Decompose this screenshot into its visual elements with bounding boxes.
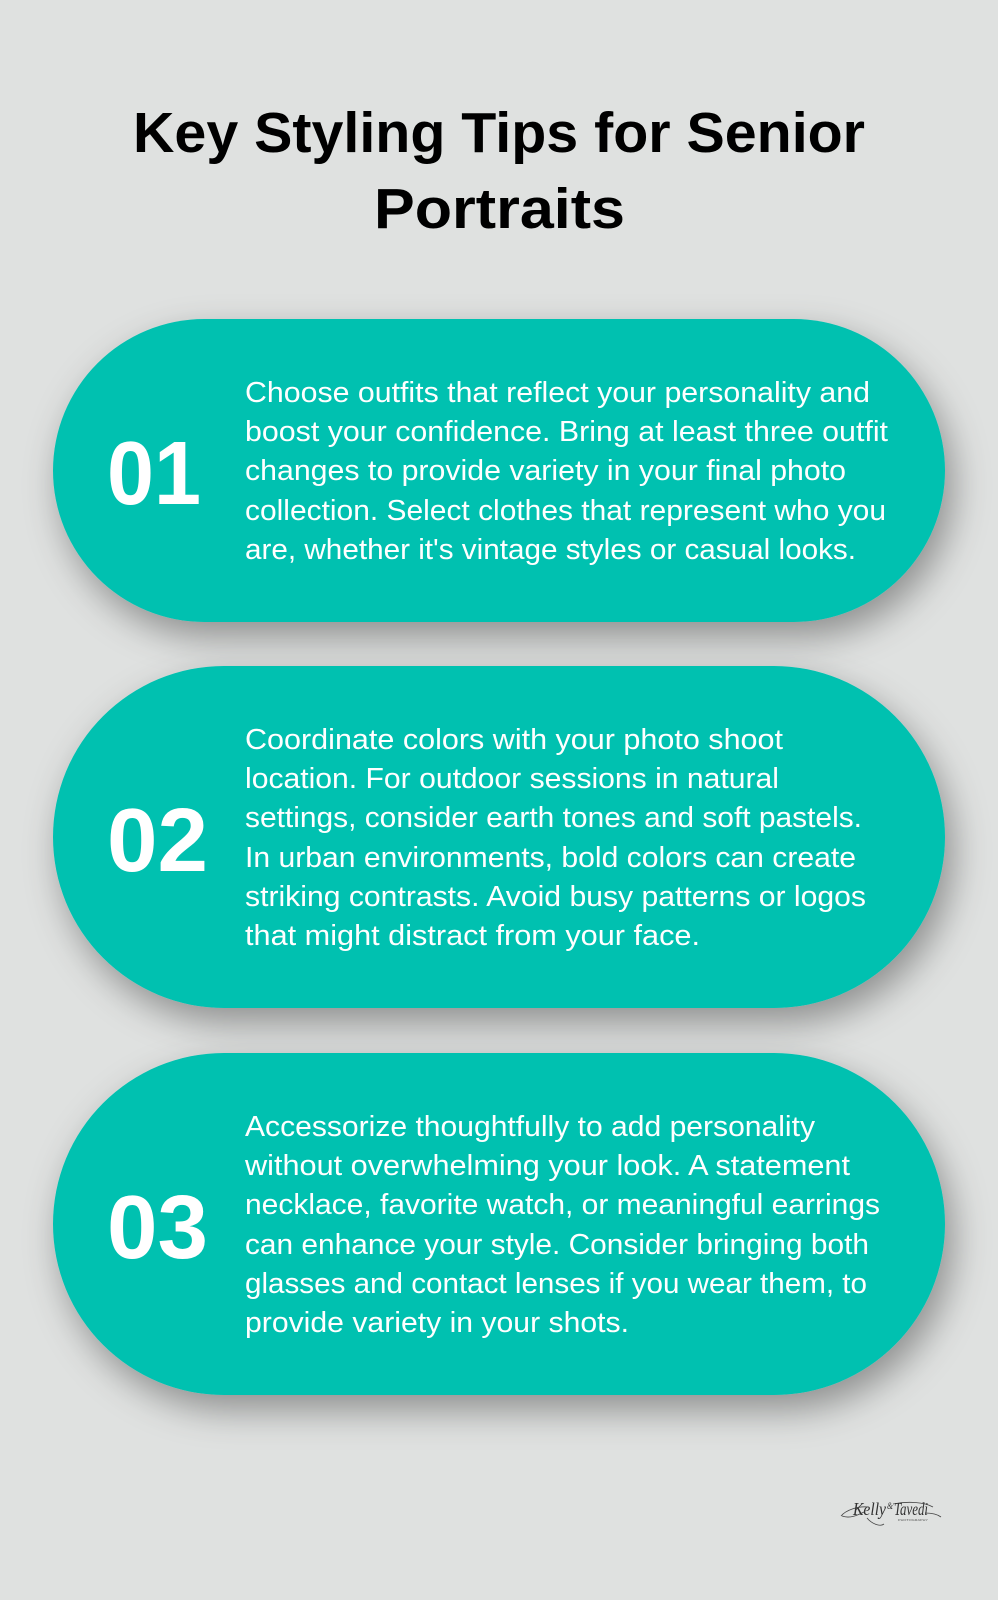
text block 01: collection. Select clothes that represent who you: [245, 495, 886, 527]
text block 02: In urban environments, bold colors can create: [245, 842, 856, 874]
text block 03: [244, 1111, 880, 1339]
number 01: 01: [107, 424, 201, 524]
logo: signature: Tavedi: [894, 1499, 928, 1519]
text block 03: can enhance your style. Consider bringing both: [245, 1229, 869, 1261]
title: Portraits: [374, 177, 625, 241]
text block 03: without overwhelming your look. A statement: [244, 1150, 850, 1182]
pill background 01: [53, 319, 945, 622]
text block 03: glasses and contact lenses if you wear them, to: [245, 1268, 867, 1300]
panel: tip 01: [53, 319, 945, 622]
text block 01: are, whether it's vintage styles or casual looks.: [245, 534, 856, 566]
title: [133, 101, 865, 241]
title: Key Styling Tips for Senior: [133, 101, 865, 165]
text block 03: Accessorize thoughtfully to add personality: [245, 1111, 816, 1143]
text block 01: changes to provide variety in your final photo: [245, 455, 846, 487]
logo: signature: Kelly: [852, 1499, 886, 1519]
text block 01: [245, 377, 888, 566]
logo: signature: &: [887, 1501, 893, 1511]
text block 01: boost your confidence. Bring at least three outfit: [245, 416, 888, 448]
text block 02: that might distract from your face.: [245, 920, 700, 952]
panel: tip 03: [53, 1053, 945, 1395]
text block 02: [245, 724, 866, 952]
text block 02: settings, consider earth tones and soft pastels.: [245, 802, 862, 834]
logo: signature: [841, 1499, 941, 1525]
text block 03: provide variety in your shots.: [245, 1307, 629, 1339]
logo: signature: PHOTOGRAPHY: [898, 1518, 928, 1522]
text block 01: Choose outfits that reflect your personality and: [245, 377, 870, 409]
text block 02: striking contrasts. Avoid busy patterns or logos: [245, 881, 866, 913]
number 03: 03: [107, 1178, 208, 1278]
text block 02: location. For outdoor sessions in natural: [245, 763, 779, 795]
panel: tip 02: [53, 666, 945, 1008]
pill background 02: [53, 666, 945, 1008]
number 02: 02: [107, 791, 208, 891]
pill background 03: [53, 1053, 945, 1395]
text block 03: necklace, favorite watch, or meaningful earrings: [245, 1189, 880, 1221]
text block 02: Coordinate colors with your photo shoot: [245, 724, 783, 756]
